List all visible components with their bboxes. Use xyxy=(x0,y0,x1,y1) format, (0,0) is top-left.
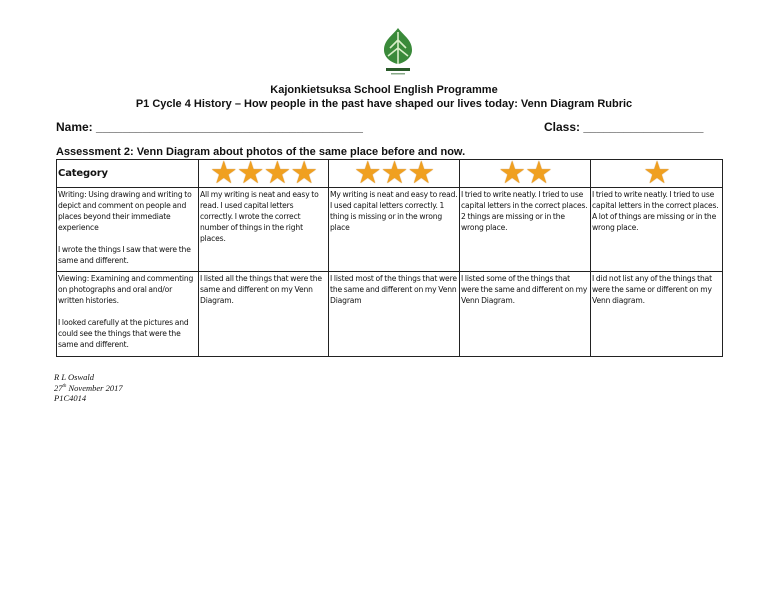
rubric table: I did not list any of the things that were the same or different on my Venn diagram. xyxy=(592,274,712,305)
name field: Name: ________________________________________ xyxy=(56,120,363,134)
logo xyxy=(384,28,412,74)
title: P1 Cycle 4 History – How people in the past have shaped our lives today: Venn Diagram Rubric xyxy=(136,98,632,110)
signature: R L Oswald xyxy=(54,372,94,382)
rubric table: ★ xyxy=(643,155,670,190)
rubric table: I tried to write neatly. I tried to use capital letters in the correct places. 2 things are missing or in the wrong place. xyxy=(461,190,588,232)
signature xyxy=(54,372,123,403)
rubric table: Viewing: Examining and commenting on photographs and oral and/or written histories. xyxy=(58,274,193,305)
signature: 27th November 2017 xyxy=(54,383,123,393)
rubric table: ★★★ xyxy=(354,155,434,190)
title xyxy=(136,84,632,110)
class field: Class: __________________ xyxy=(544,120,703,134)
title: Kajonkietsuksa School English Programme xyxy=(270,84,498,96)
signature: P1C4014 xyxy=(54,393,86,403)
rubric table: ★★ xyxy=(498,155,552,190)
rubric table: ★★★★ xyxy=(210,155,317,190)
rubric table: I listed all the things that were the same and different on my Venn Diagram. xyxy=(200,274,322,305)
rubric table xyxy=(56,155,723,357)
rubric table: I looked carefully at the pictures and could see the things that were the same and different. xyxy=(58,318,189,349)
rubric table: I listed most of the things that were the same and different on my Venn Diagram xyxy=(330,274,457,305)
rubric table: All my writing is neat and easy to read. I used capital letters correctly. I wrote the correct number of things in the right places. xyxy=(200,190,319,243)
rubric table: My writing is neat and easy to read. I used capital letters correctly. 1 thing is missing or in the wrong place xyxy=(330,190,458,232)
rubric table: I tried to write neatly. I tried to use capital letters in the correct places. A lot of things are missing or in the wrong place. xyxy=(592,190,719,232)
rubric table: Category xyxy=(58,168,108,179)
rubric table: I wrote the things I saw that were the same and different. xyxy=(58,245,191,265)
rubric table: I listed some of the things that were the same and different on my Venn Diagram. xyxy=(461,274,587,305)
subtitle: Assessment 2: Venn Diagram about photos of the same place before and now. xyxy=(56,146,465,158)
rubric table: Writing: Using drawing and writing to depict and comment on people and places beyond their immediate experience xyxy=(58,190,192,232)
